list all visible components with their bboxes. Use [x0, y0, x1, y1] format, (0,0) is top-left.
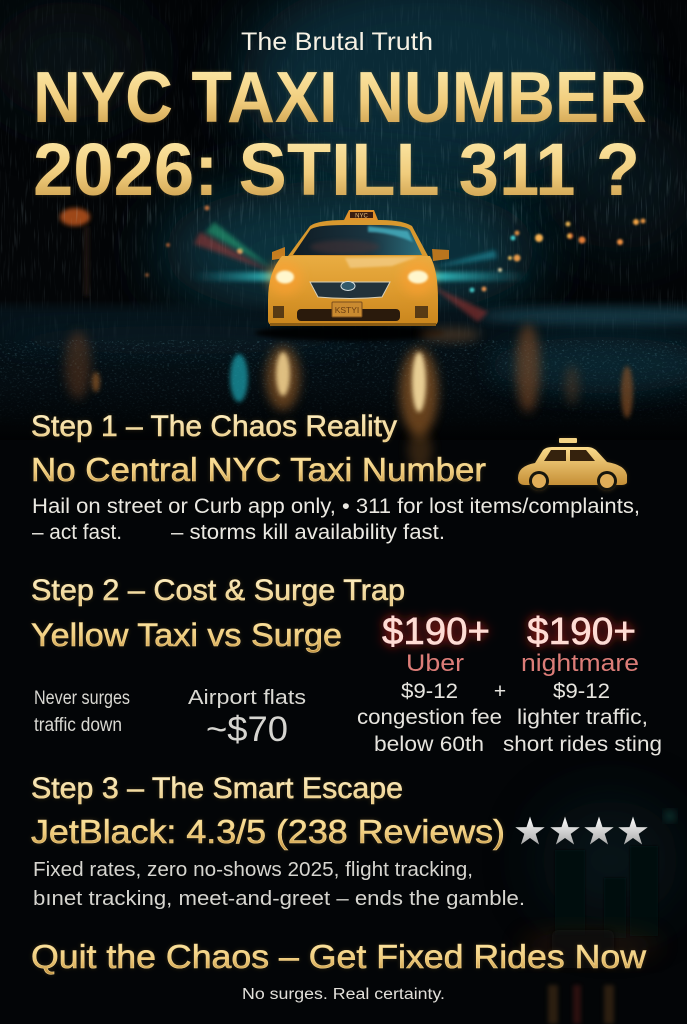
- stat: nightmare price: [521, 611, 639, 677]
- stat: nightmare price: nightmare: [521, 650, 639, 677]
- roof sign: NYC: [355, 214, 368, 220]
- step 3 body text: bınet tracking, meet-and-greet – ends the gamble.: [33, 888, 525, 910]
- lower intake and plate: [297, 309, 400, 321]
- note: congestion fee: [357, 680, 506, 756]
- street reflections: [0, 324, 687, 470]
- grille: [310, 282, 390, 298]
- headlights: [268, 261, 435, 295]
- step 2 subheading: Yellow Taxi vs Surge: [31, 617, 342, 653]
- car body: [268, 256, 438, 326]
- note: airport flats: ~$70: [206, 710, 288, 749]
- icon: rating stars: [515, 816, 648, 844]
- main title: 2026: STILL 311 ?: [33, 128, 640, 211]
- note: congestion fee: $9-12: [401, 680, 458, 703]
- stat: Uber price: [382, 611, 490, 677]
- step 1 subheading: No Central NYC Taxi Number: [31, 451, 486, 488]
- step 3 panel: [31, 772, 648, 910]
- note: lighter traffic: lighter traffic,: [517, 706, 648, 729]
- icon: gold taxi: [518, 438, 627, 491]
- note: congestion fee: congestion fee: [357, 706, 502, 729]
- taxi illustration: KSTYI: [335, 305, 359, 315]
- note: congestion fee: below 60th: [374, 733, 484, 756]
- call to action: [31, 938, 646, 1003]
- roof sign: [344, 210, 378, 220]
- stat: nightmare price: $190+: [527, 611, 636, 653]
- left street lamp: [60, 208, 90, 296]
- main title: NYC TAXI NUMBER: [33, 58, 647, 138]
- rain streaks: [0, 0, 687, 350]
- note: lighter traffic: [503, 680, 662, 756]
- side mirrors: [272, 247, 285, 260]
- cabin and windshield: [288, 220, 428, 256]
- step 2 heading: Step 2 – Cost & Surge Trap: [31, 574, 405, 607]
- step 3 body text: [33, 859, 525, 910]
- step 1 body text: – act fast.: [32, 521, 122, 544]
- step 1 heading: Step 1 – The Chaos Reality: [31, 410, 397, 443]
- wet road: [0, 300, 687, 440]
- step 1 body text: [32, 495, 640, 544]
- note: lighter traffic: short rides sting: [503, 733, 662, 756]
- step 2 panel: [31, 574, 662, 756]
- step 3 rating heading: JetBlack: 4.3/5 (238 Reviews): [31, 813, 505, 850]
- main title: [33, 58, 647, 211]
- stat: Uber price: $190+: [382, 611, 490, 653]
- step 3 heading: Step 3 – The Smart Escape: [31, 772, 403, 805]
- step 3 body text: Fixed rates, zero no-shows 2025, flight tracking,: [33, 859, 473, 881]
- note: never surges: [34, 688, 130, 736]
- tagline: No surges. Real certainty.: [242, 986, 445, 1003]
- stat: Uber price: Uber: [406, 650, 464, 677]
- kicker: The Brutal Truth: The Brutal Truth: [241, 28, 433, 56]
- note: never surges: Never surges: [34, 688, 130, 709]
- lens flare rays: [190, 222, 532, 322]
- note: airport flats: Airport flats: [188, 687, 306, 709]
- note: never surges: traffic down: [34, 715, 122, 736]
- note: airport flats: [188, 687, 306, 749]
- note: lighter traffic: $9-12: [553, 680, 610, 703]
- call to action: Quit the Chaos – Get Fixed Rides Now: [31, 938, 646, 975]
- step 1 panel: [31, 410, 640, 544]
- distant skyline, lower right: [520, 800, 680, 1024]
- distant city lights: [145, 206, 646, 292]
- step 1 body text: – storms kill availability fast.: [171, 521, 445, 544]
- taxi illustration: [268, 210, 449, 326]
- step 1 body text: Hail on street or Curb app only, • 311 for lost items/complaints,: [32, 495, 640, 518]
- note: congestion fee: +: [494, 680, 506, 703]
